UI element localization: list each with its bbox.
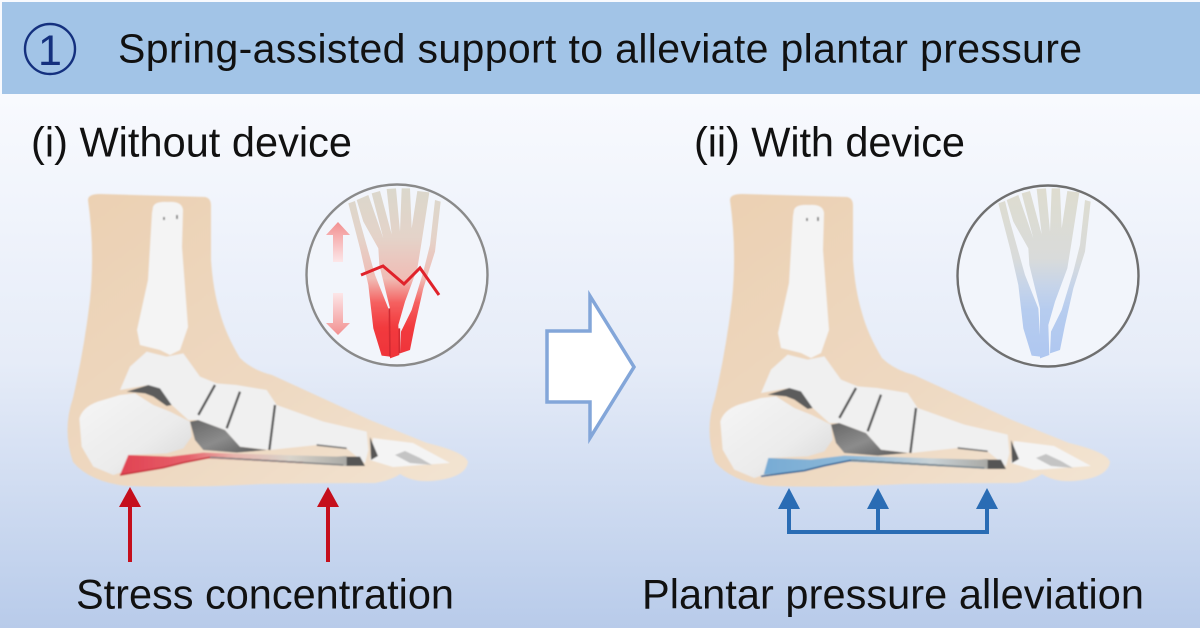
plantar fascia fan: red [348, 188, 441, 358]
arrows: blue distributed support [778, 488, 998, 532]
tibia screw holes [164, 215, 177, 220]
header banner [2, 2, 1200, 94]
plantar fascia fan: blue [998, 188, 1091, 358]
arrow: transition between states [547, 296, 634, 438]
foot skin [710, 194, 1110, 487]
arrow: left red stress [119, 487, 141, 562]
tibia bone [137, 202, 188, 355]
foot bones [79, 352, 368, 475]
tibia bone [778, 205, 829, 358]
tibia screw holes [807, 217, 818, 221]
heading: without device: (i) Without device [31, 118, 352, 166]
foot illustration: with device [710, 194, 1110, 487]
arrow: pink down [326, 293, 350, 335]
arrow: pink up [326, 222, 350, 262]
zigzag line: strain [361, 266, 439, 295]
foot skin [68, 194, 468, 487]
toe bones [370, 438, 450, 467]
icon: circled number one: 1 [38, 27, 62, 75]
caption: plantar pressure alleviation: Plantar pressure alleviation [642, 570, 1144, 618]
foot bones [720, 355, 1009, 478]
toe bones [1011, 440, 1091, 470]
foot illustration: without device [68, 194, 468, 487]
arrow: right red stress [317, 487, 339, 562]
title: Spring-assisted support to alleviate plantar pressure [118, 26, 1082, 72]
heading: with device: (ii) With device [694, 118, 965, 166]
caption: stress concentration: Stress concentration [76, 570, 454, 618]
icon: circled number one [25, 24, 75, 75]
inset circle: stressed plantar fascia [306, 184, 488, 366]
plantar fascia band: red [120, 453, 347, 475]
inset circle: relieved plantar fascia [958, 186, 1138, 366]
plantar fascia band: blue [764, 456, 988, 475]
